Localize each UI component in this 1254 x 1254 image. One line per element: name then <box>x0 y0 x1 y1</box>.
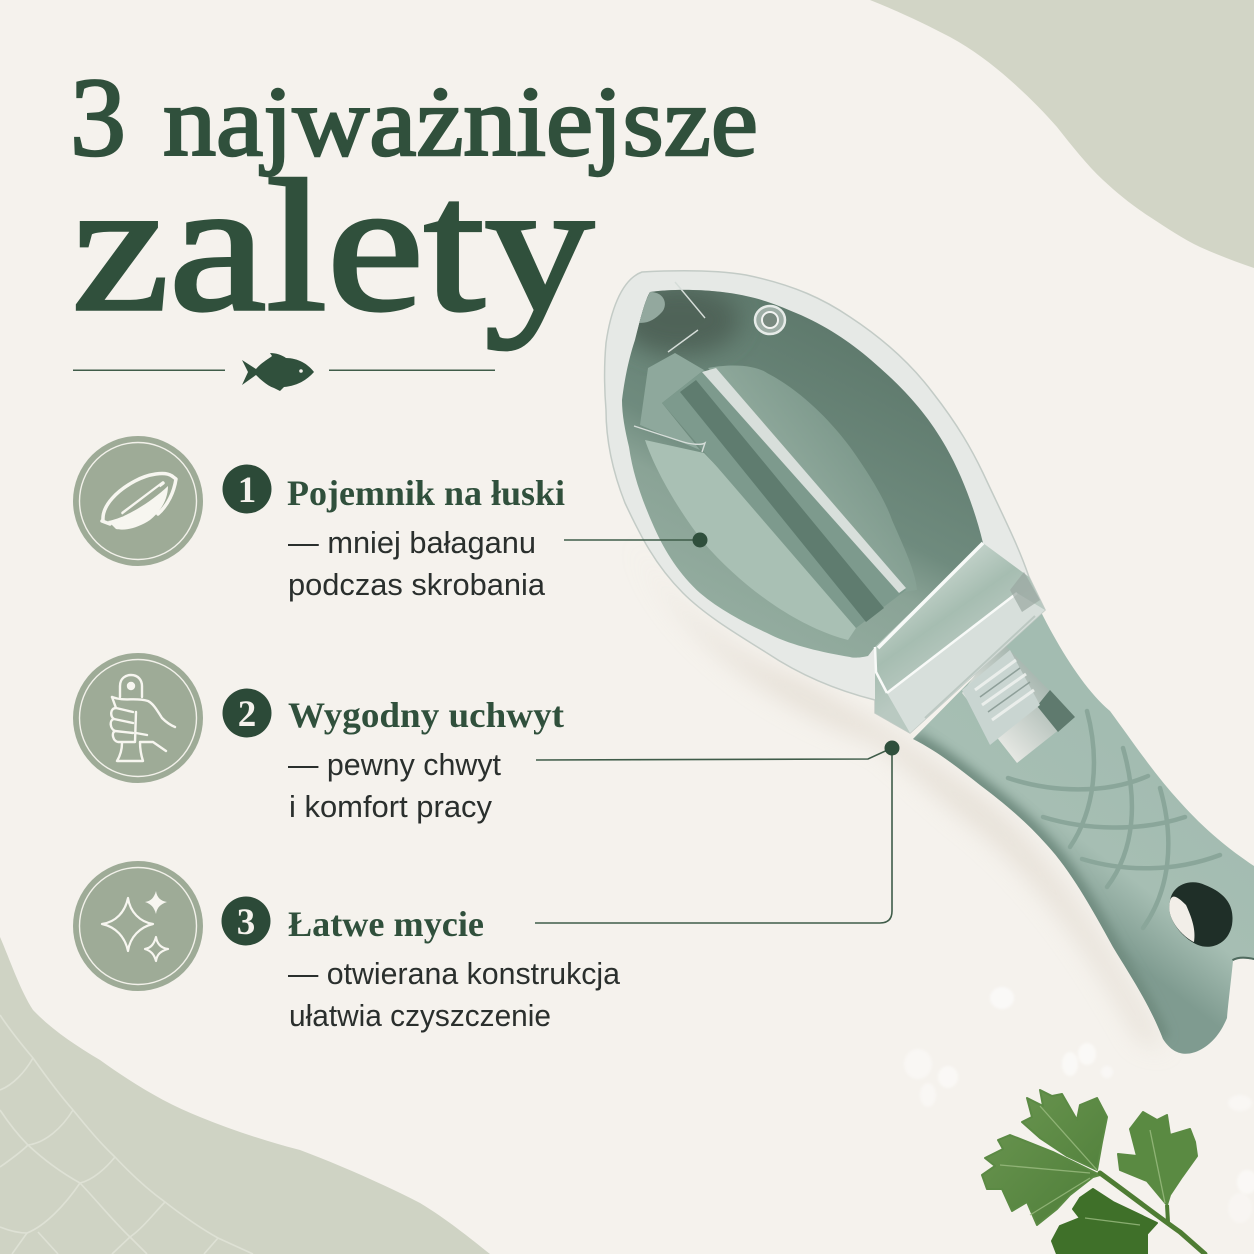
divider with fish icon <box>73 353 495 391</box>
title: najważniejsze <box>163 66 758 177</box>
feature 2 text: i komfort pracy <box>289 789 492 824</box>
feature 1 text: — mniej bałaganu <box>288 525 536 560</box>
salt crystals <box>904 987 1254 1223</box>
top right wave shape <box>870 0 1254 268</box>
feature 3 text: ułatwia czyszczenie <box>289 998 551 1033</box>
light plate lower left <box>645 440 856 640</box>
feature 1 text <box>287 473 565 602</box>
roller window <box>962 640 1075 763</box>
lid hole <box>755 306 785 334</box>
plate top left <box>640 353 704 450</box>
handle <box>913 610 1254 1054</box>
ridge right of blade <box>708 365 917 592</box>
feature 1 text: podczas skrobania <box>288 567 546 602</box>
lid scratches <box>634 282 705 452</box>
green bowl <box>622 290 983 658</box>
feature 3 text <box>288 904 621 1033</box>
number badge 3 <box>222 896 270 946</box>
number badge 2 <box>222 688 272 738</box>
number badge 1: 1 <box>238 470 256 511</box>
feature 1 icon: scale container <box>73 436 203 566</box>
feature 1 text: Pojemnik na łuski <box>287 473 565 513</box>
scraper channel <box>662 370 906 628</box>
feature 3 icon: sparkles <box>73 861 203 991</box>
parsley sprig <box>982 1090 1205 1254</box>
bowl details <box>620 285 917 640</box>
bottom left wave with net pattern <box>0 937 490 1254</box>
feature 3 text: Łatwe mycie <box>288 904 484 944</box>
feature 2 text <box>288 695 564 824</box>
title: 3 <box>70 56 126 180</box>
product: fish scaler <box>604 271 1254 1054</box>
number badge 2: 2 <box>238 694 256 735</box>
clear lid outer shell <box>604 271 1045 733</box>
feature 2 text: — pewny chwyt <box>288 747 501 782</box>
number badge 1 <box>222 464 272 514</box>
product shadow <box>625 520 1165 1050</box>
number badge 3: 3 <box>237 902 255 943</box>
net pattern on handle <box>1008 711 1220 928</box>
clear hinge band <box>875 543 1045 733</box>
title <box>70 56 758 350</box>
feature 2 text: Wygodny uchwyt <box>288 695 564 735</box>
feature 3 text: — otwierana konstrukcja <box>288 956 621 991</box>
leader lines 2 and 3 <box>535 740 900 923</box>
leader line 1 <box>564 532 708 548</box>
title: zalety <box>72 141 594 350</box>
hanging hole <box>1169 882 1233 947</box>
feature 2 icon: hand grip <box>73 653 203 783</box>
